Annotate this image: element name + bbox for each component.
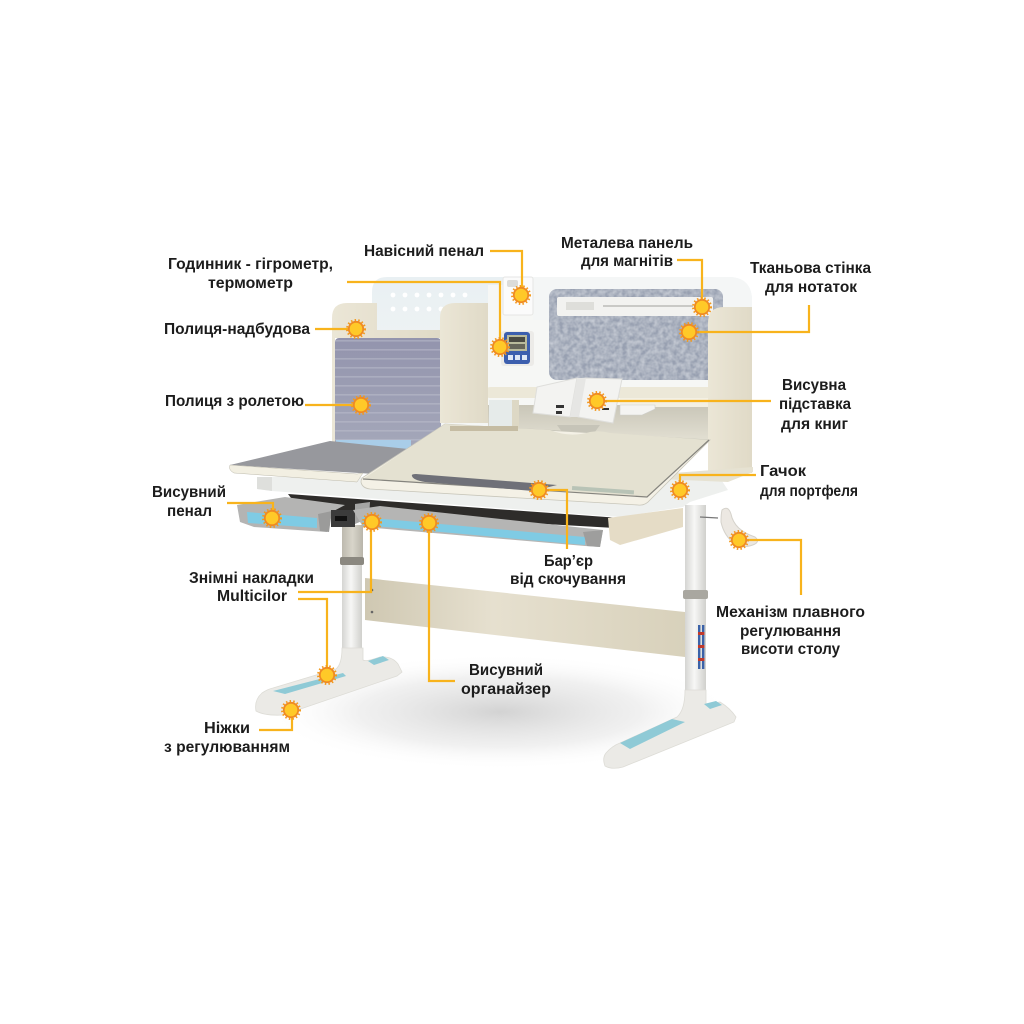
organizer drawer	[353, 506, 683, 547]
callout: organizer	[420, 514, 551, 698]
callout: pencil drawer: Висувний	[152, 484, 226, 501]
callout: book stand: підставка	[779, 396, 851, 413]
perforated panel dots	[391, 293, 467, 311]
pencil drawer	[237, 497, 370, 532]
callout: clock: термометр	[208, 275, 293, 292]
crank handle	[700, 508, 758, 546]
callout: removable covers: Multicilor	[217, 588, 287, 605]
callout: fabric wall	[680, 260, 871, 341]
metal panel	[557, 297, 713, 316]
callout: removable covers	[189, 513, 381, 684]
callout: organizer: органайзер	[461, 681, 551, 698]
callout: clock	[168, 256, 509, 356]
callout: height mechanism: висоти столу	[741, 641, 840, 658]
lower back	[488, 405, 708, 440]
left desktop	[230, 441, 418, 482]
blind shelf	[335, 338, 441, 452]
left foot	[256, 648, 402, 715]
callout: removable covers: Знімні накладки	[189, 570, 314, 587]
callout: anti-slip barrier	[510, 481, 626, 588]
right foot	[604, 690, 736, 768]
callout: book stand: для книг	[781, 416, 848, 433]
callout: pencil drawer	[152, 484, 281, 527]
callout: anti-slip barrier: Бар’єр	[544, 553, 593, 570]
right leg	[683, 505, 708, 715]
callout: shelf top: Полиця-надбудова	[164, 321, 310, 338]
callout: metal panel: для магнітів	[581, 253, 673, 270]
callout: book stand	[588, 377, 851, 433]
upper shelf	[485, 387, 708, 407]
right wood side	[708, 307, 752, 473]
callout: bag hook: Гачок	[760, 463, 807, 480]
floor shadow	[265, 654, 735, 770]
callout: hanging pencil case: Навісний пенал	[364, 243, 484, 260]
desk illustration	[230, 277, 758, 770]
callout: book stand: Висувна	[782, 377, 846, 394]
tilting desktop	[361, 424, 710, 505]
callout: organizer: Висувний	[469, 662, 543, 679]
callout: bag hook: для портфеля	[760, 483, 858, 500]
callout: height mechanism: регулювання	[740, 623, 841, 640]
left shelf side	[332, 303, 440, 452]
hook platform	[660, 467, 753, 482]
callout: adjustable feet: Ніжки	[204, 720, 250, 737]
callout: clock: Годинник - гігрометр,	[168, 256, 333, 273]
under-desk dark gap	[288, 494, 620, 528]
callout: pencil drawer: пенал	[167, 503, 212, 520]
crossbar	[365, 578, 685, 657]
book stand	[533, 378, 655, 423]
callout: fabric wall: Тканьова стінка	[750, 260, 871, 277]
felt wall	[549, 289, 723, 380]
callout: height mechanism: Механізм плавного	[716, 604, 865, 621]
back panel	[372, 277, 752, 440]
callout: bag hook	[671, 463, 858, 500]
hanging pencil case	[503, 277, 533, 315]
wood partition	[440, 303, 488, 423]
left leg	[340, 525, 364, 670]
clock	[501, 331, 534, 366]
apron	[257, 477, 728, 517]
callout: roller shelf: Полиця з ролетою	[165, 393, 304, 410]
callout: adjustable feet	[164, 701, 300, 756]
callout: hanging pencil case	[364, 243, 530, 304]
callout: metal panel	[561, 235, 711, 316]
callout: metal panel: Металева панель	[561, 235, 693, 252]
callout: roller shelf	[165, 393, 370, 414]
callout: fabric wall: для нотаток	[765, 279, 858, 296]
callout: anti-slip barrier: від скочування	[510, 571, 626, 588]
callout: height mechanism	[716, 531, 865, 658]
callout: adjustable feet: з регулюванням	[164, 739, 290, 756]
